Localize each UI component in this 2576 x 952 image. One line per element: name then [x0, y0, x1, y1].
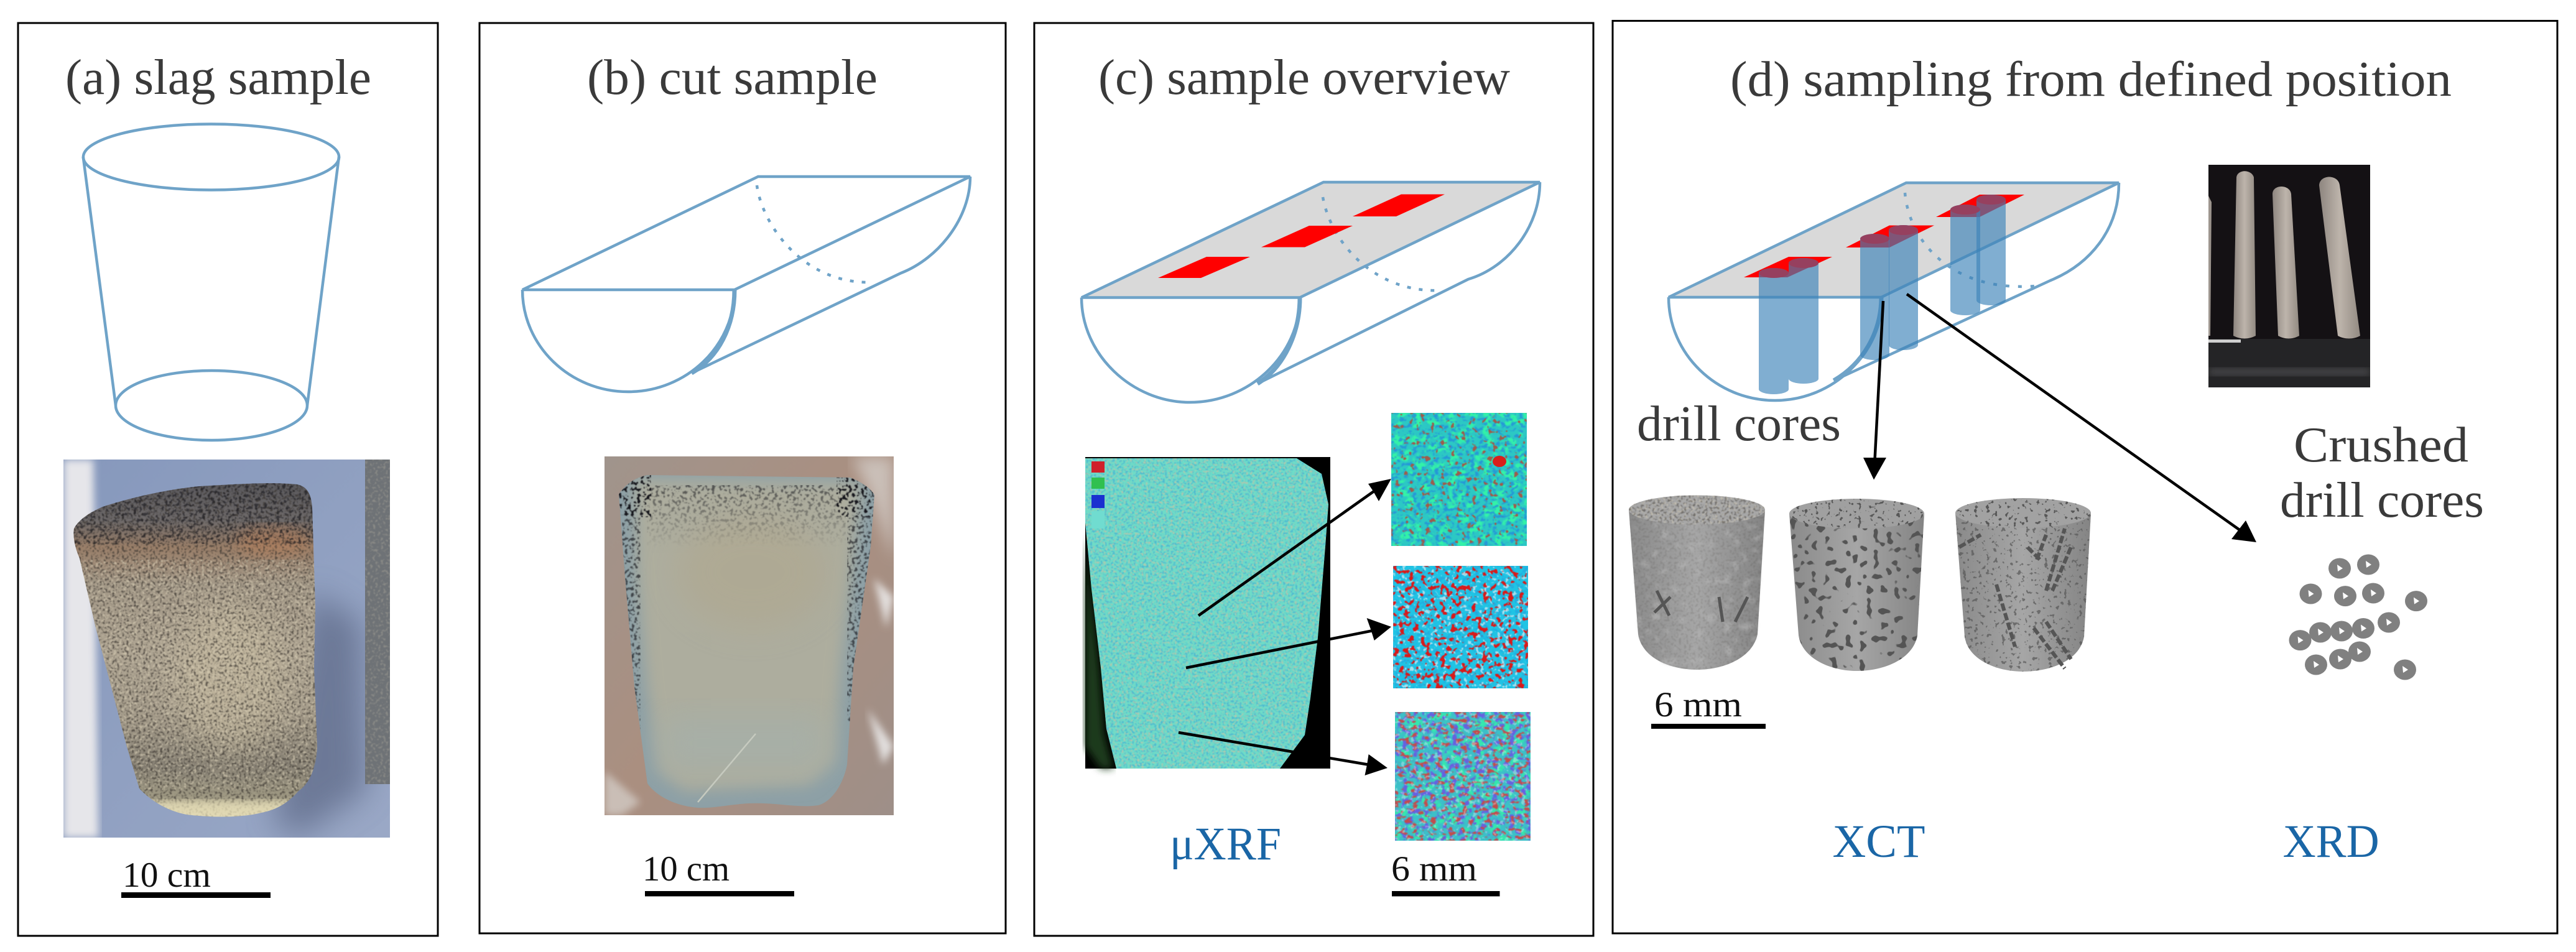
- heading: sampling from defined position: (d) sampling from defined position: [1730, 52, 2452, 107]
- label: μXRF: μXRF: [1170, 818, 1281, 870]
- map: detail middle: [1393, 566, 1528, 688]
- panel: cut sample: [480, 23, 1006, 933]
- icon: crushed core fragments: [2289, 555, 2427, 680]
- diagram: half cylinder with scan areas: [1082, 182, 1540, 402]
- photo: cut sample: [605, 456, 894, 815]
- heading: slag sample: (a) slag sample: [65, 50, 371, 105]
- panel: slag sample: [18, 23, 438, 936]
- label: crushed drill cores: Crushed: [2294, 418, 2468, 473]
- panel: sampling from defined position: [1613, 21, 2557, 933]
- panel: sample overview: [1034, 23, 1593, 936]
- arrow: to XCT cores: [1863, 301, 1886, 480]
- label: XCT: XCT: [1832, 816, 1925, 867]
- photo: slag sample: [63, 460, 390, 838]
- XCT cylinder left: [1629, 495, 1765, 670]
- arrow: to crushed cores: [1907, 294, 2256, 542]
- diagram: half cylinder: [522, 177, 970, 392]
- map: detail upper: [1391, 413, 1527, 546]
- diagram: truncated cone: [83, 124, 339, 440]
- arrow: to middle detail: [1186, 618, 1391, 668]
- scale bar: 10 cm: [121, 856, 271, 898]
- photo: drill cores: [2208, 165, 2370, 387]
- arrow: to upper detail: [1198, 479, 1391, 616]
- XCT cylinder right: [1955, 498, 2091, 672]
- heading: sample overview: (c) sample overview: [1098, 50, 1510, 105]
- map: detail lower: [1395, 712, 1531, 841]
- map: full sample XRF: [1085, 457, 1330, 769]
- scale bar: 10 cm: [642, 849, 794, 897]
- scale bar: 6 mm: 6 mm: [1654, 685, 1742, 724]
- label: XRD: XRD: [2283, 816, 2379, 867]
- scale bar: 6 mm: [1391, 849, 1500, 897]
- diagram: half cylinder with drill cores: [1669, 183, 2119, 400]
- scale bar: 10 cm: 10 cm: [123, 856, 211, 895]
- arrow: to lower detail: [1179, 732, 1388, 775]
- scale bar: 10 cm: 10 cm: [642, 849, 730, 889]
- XCT cylinder middle: [1789, 499, 1924, 671]
- heading: cut sample: (b) cut sample: [587, 50, 878, 105]
- scale bar: 6 mm: 6 mm: [1391, 849, 1477, 889]
- label: crushed drill cores: drill cores: [2280, 473, 2484, 528]
- label: drill cores: drill cores: [1637, 397, 1841, 451]
- label: crushed drill cores: [2280, 418, 2484, 528]
- scale bar: 6 mm: [1651, 685, 1766, 729]
